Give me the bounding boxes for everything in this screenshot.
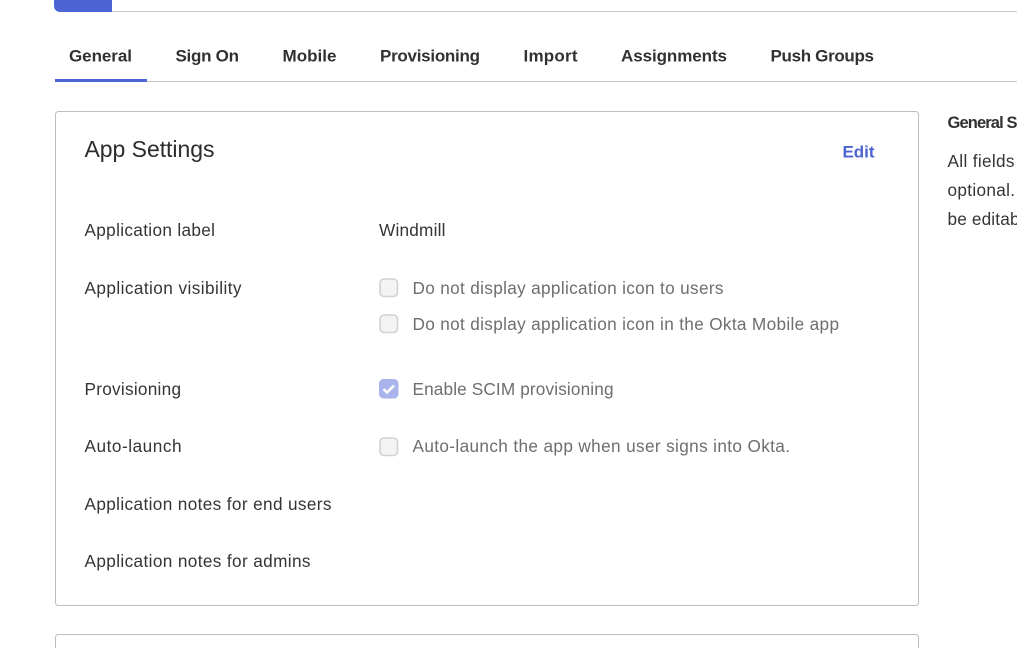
- field labels: [84, 220, 332, 571]
- field labels: Application label: [84, 220, 215, 240]
- visibility option: hide icon in mobile app: Do not display application icon in the Okta Mobile app: [412, 314, 839, 334]
- top header tab strip: [54, 0, 1017, 12]
- navigation tabs: Push Groups: [770, 46, 874, 66]
- application label value: Windmill: [379, 220, 446, 240]
- auto-launch option: Auto-launch the app when user signs into Okta.: [412, 436, 790, 456]
- field labels: Application notes for end users: [84, 494, 332, 514]
- field labels: Application notes for admins: [84, 551, 310, 571]
- provisioning checkbox: enabled: Enable SCIM provisioning: [412, 379, 614, 399]
- navigation tabs: General: [69, 46, 132, 66]
- panel: app settings: [56, 112, 918, 606]
- navigation tabs: Provisioning: [380, 46, 480, 66]
- field labels: Auto-launch: [84, 436, 182, 456]
- sidebar help text: General S: [948, 114, 1017, 132]
- panel heading: App Settings: [84, 136, 214, 162]
- navigation tabs: Sign On: [176, 46, 239, 66]
- field labels: Provisioning: [84, 379, 181, 399]
- field labels: Application visibility: [84, 278, 242, 298]
- edit link: Edit: [842, 142, 875, 162]
- sidebar help text: optional.: [948, 180, 1015, 200]
- visibility option: hide icon from users: Do not display application icon to users: [412, 278, 724, 298]
- navigation tabs: Mobile: [282, 46, 336, 66]
- next panel top edge: [56, 634, 918, 648]
- sidebar help text: All fields: [948, 151, 1014, 171]
- navigation tabs: [55, 46, 1017, 82]
- navigation tabs: Import: [524, 46, 578, 66]
- sidebar help text: [948, 114, 1017, 229]
- navigation tabs: Assignments: [621, 46, 727, 66]
